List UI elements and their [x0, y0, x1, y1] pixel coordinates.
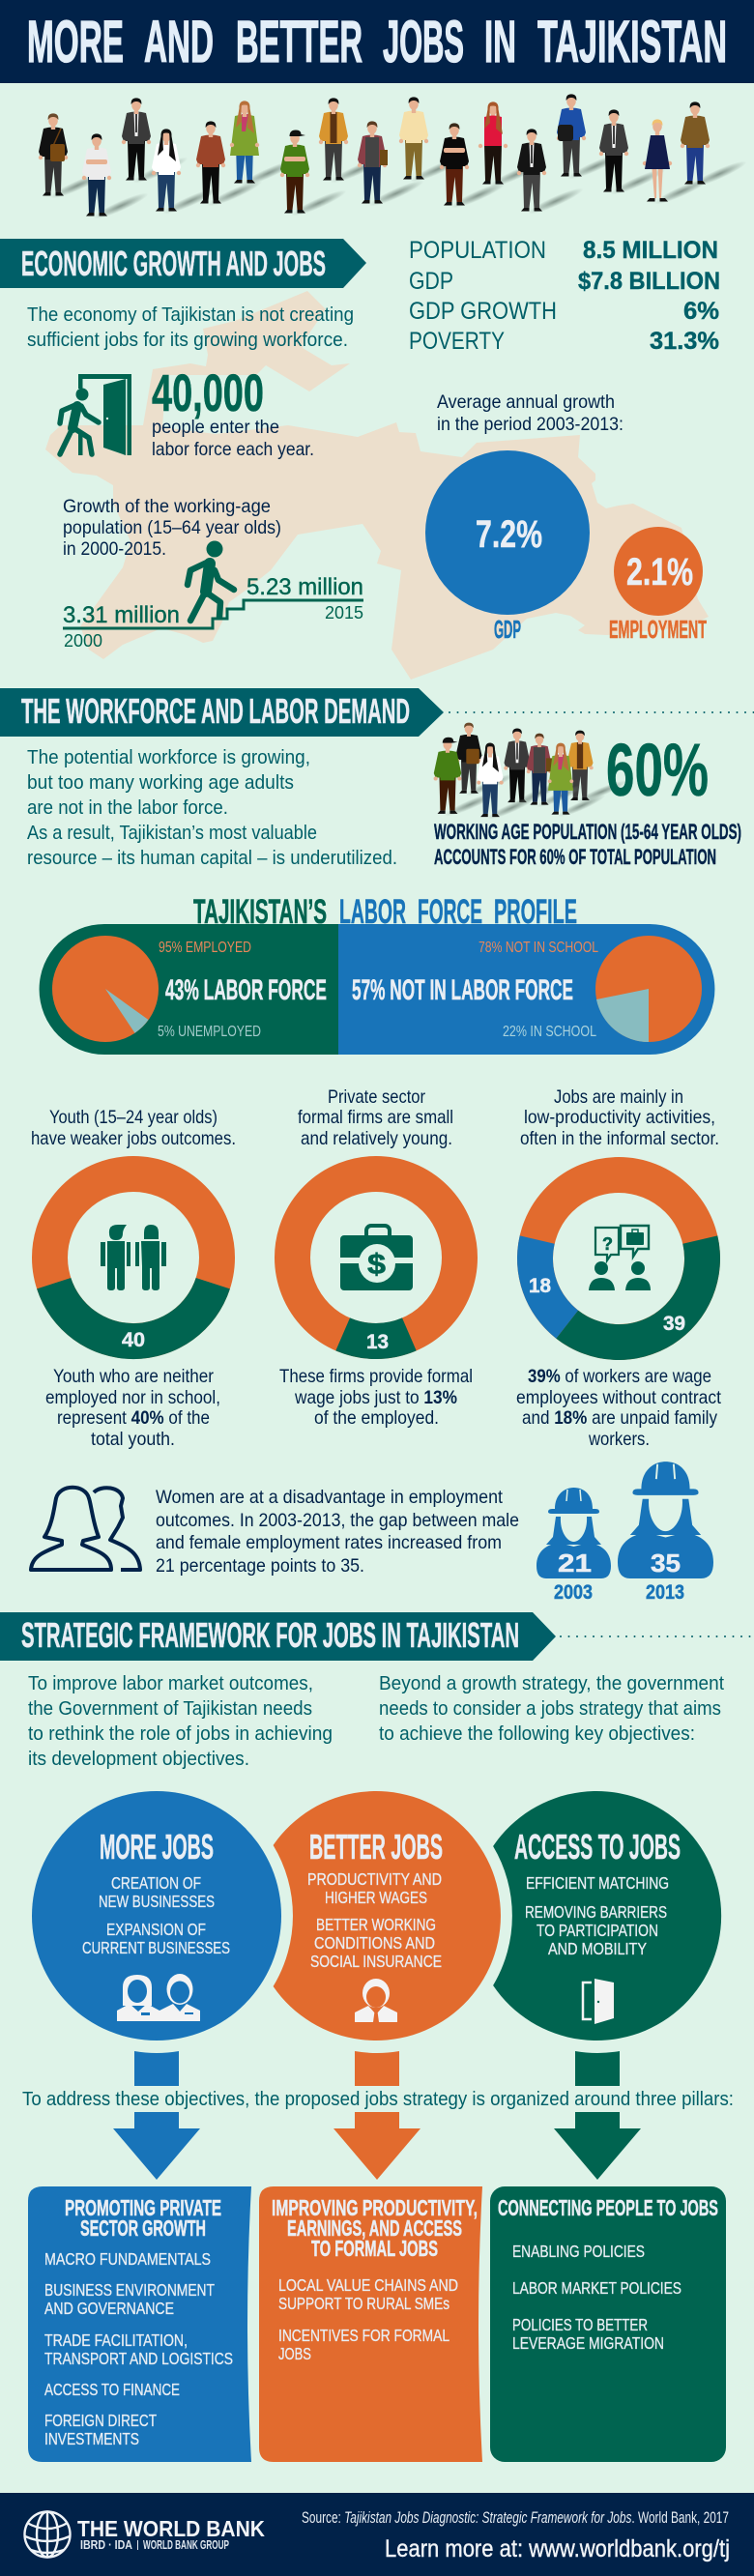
- World Bank wordmark: WORLD BANK GROUP: [143, 2538, 229, 2552]
- bubble: GDP growth: GDP: [494, 615, 521, 644]
- working-age growth caption: in 2000-2015.: [63, 539, 166, 560]
- icon: person entering door: [60, 374, 131, 455]
- bubble: GDP growth: [425, 450, 590, 644]
- objective circle: more jobs: CURRENT BUSINESSES: [82, 1938, 230, 1957]
- framework text right: needs to consider a jobs strategy that aims: [379, 1697, 721, 1720]
- icon: helmeted woman 2003: [536, 1488, 611, 1604]
- title banner: JOBS: [383, 9, 464, 74]
- stat: 40,000 people: [152, 364, 314, 460]
- objective circle: more jobs: NEW BUSINESSES: [99, 1892, 215, 1911]
- heading: labor force profile: [193, 893, 577, 931]
- panel: promoting private sector growth: ACCESS TO FINANCE: [44, 2380, 180, 2399]
- framework text left: to rethink the role of jobs in achieving: [28, 1722, 333, 1745]
- objective circle: better jobs: CONDITIONS AND: [314, 1933, 435, 1953]
- title banner: MORE: [27, 9, 124, 74]
- icon: man and woman outline: [31, 1488, 140, 1570]
- panel: labor force: [40, 924, 338, 1055]
- key statistics table: 8.5 MILLION: [583, 237, 718, 264]
- bubble: employment growth: [609, 527, 707, 644]
- heading: labor force profile: LABOR: [339, 893, 406, 931]
- key statistics table: 6%: [683, 298, 719, 325]
- panel: low-productivity donut: employees without contract: [516, 1387, 722, 1408]
- framework text right: Beyond a growth strategy, the government: [379, 1672, 724, 1694]
- panel: not in labor force: [338, 924, 714, 1055]
- panel: promoting private sector growth: AND GOVERNANCE: [44, 2299, 174, 2318]
- objective circle: access to jobs: TO PARTICIPATION: [536, 1921, 658, 1940]
- objective circle: better jobs: [274, 1791, 501, 2041]
- key statistics table: [409, 237, 720, 355]
- panel: low-productivity donut: workers.: [588, 1429, 650, 1450]
- bubble: employment growth: 2.1%: [626, 551, 693, 593]
- objective circle: more jobs: EXPANSION OF: [106, 1920, 206, 1939]
- stairs chart: working-age population 2000 to 2015: 2000: [64, 631, 102, 651]
- arrow stem: more jobs: [134, 2051, 179, 2086]
- stat: 40,000 people: labor force each year.: [152, 439, 314, 460]
- row of people illustration: [39, 94, 748, 222]
- panel: youth donut: total youth.: [91, 1429, 175, 1450]
- average growth caption: [437, 392, 624, 435]
- stat: 40,000 people: people enter the: [152, 417, 279, 438]
- panel: private firms donut: [279, 1086, 473, 1429]
- icon: two staff busts: [117, 1974, 200, 2021]
- framework text right: to achieve the following key objectives:: [379, 1722, 695, 1745]
- section heading: workforce and labor demand: THE WORKFORCE AND LABOR DEMAND: [21, 691, 410, 731]
- icon: helmeted woman 2013: 35: [651, 1548, 681, 1577]
- framework text right: [379, 1672, 724, 1745]
- icon: helmeted woman 2003: 2003: [554, 1581, 593, 1604]
- stat: 60 percent: [434, 729, 741, 869]
- key statistics table: POVERTY: [409, 328, 505, 355]
- panel: private firms donut: 13: [366, 1331, 389, 1353]
- intro text: The economy of Tajikistan is not creating: [27, 304, 354, 326]
- map of Tajikistan: [45, 291, 709, 680]
- panel: labor force: 95% EMPLOYED: [159, 940, 251, 956]
- objective circle: better jobs: SOCIAL INSURANCE: [310, 1952, 442, 1971]
- panel: promoting private sector growth: MACRO FUNDAMENTALS: [44, 2249, 211, 2269]
- panel: promoting private sector growth: [28, 2186, 251, 2462]
- objective circle: better jobs: BETTER WORKING: [316, 1915, 436, 1934]
- objective circle: access to jobs: AND MOBILITY: [548, 1939, 647, 1958]
- framework text left: the Government of Tajikistan needs: [28, 1697, 312, 1720]
- stairs chart: working-age population 2000 to 2015: [63, 541, 363, 651]
- workforce text: but too many working age adults: [27, 771, 294, 794]
- panel: youth donut: [31, 1107, 236, 1450]
- section heading: economic growth and jobs: ECONOMIC GROWTH AND JOBS: [21, 244, 326, 283]
- objective circle: more jobs: MORE JOBS: [100, 1827, 214, 1867]
- objective circle: access to jobs: EFFICIENT MATCHING: [526, 1873, 669, 1893]
- stairs chart: working-age population 2000 to 2015: 5.23 million: [246, 574, 363, 600]
- women employment text: [156, 1487, 519, 1577]
- panel: not in labor force: 78% NOT IN SCHOOL: [478, 940, 598, 956]
- panel: labor force: 5% UNEMPLOYED: [158, 1024, 261, 1040]
- panel: not in labor force: 57% NOT IN LABOR FORCE: [352, 974, 573, 1006]
- women employment text: 21 percentage points to 35.: [156, 1555, 364, 1577]
- icon: helmeted woman 2013: 2013: [646, 1581, 684, 1604]
- heading: labor force profile: PROFILE: [494, 893, 577, 931]
- panel: improving productivity: INCENTIVES FOR FORMAL: [278, 2326, 450, 2345]
- panel: connecting people to jobs: POLICIES TO BETTER: [512, 2315, 648, 2334]
- panel: youth donut: represent 40% of the: [57, 1407, 210, 1429]
- panel: low-productivity donut: often in the informal sector.: [520, 1128, 719, 1149]
- panel: promoting private sector growth: TRADE FACILITATION,: [44, 2330, 188, 2350]
- panel: private firms donut: formal firms are small: [298, 1107, 453, 1128]
- icon: helmeted woman 2013: [618, 1462, 713, 1604]
- framework text left: [28, 1672, 333, 1770]
- intro text: [27, 304, 354, 351]
- women employment text: Women are at a disadvantage in employment: [156, 1487, 504, 1508]
- working-age growth caption: population (15–64 year olds): [63, 518, 281, 538]
- panel: private firms donut: Private sector: [328, 1086, 425, 1108]
- workforce text: resource – its human capital – is underutilized.: [27, 847, 397, 869]
- panel: connecting people to jobs: LABOR MARKET POLICIES: [512, 2278, 682, 2298]
- icon: open door: [583, 1979, 614, 2024]
- panel: youth donut: Youth (15–24 year olds): [49, 1107, 218, 1128]
- icon: manager bust: [355, 1979, 397, 2022]
- World Bank wordmark: THE WORLD BANK: [77, 2516, 265, 2541]
- panel: improving productivity: IMPROVING PRODUCTIVITY,: [272, 2195, 478, 2220]
- workforce text: As a result, Tajikistan’s most valuable: [27, 822, 317, 844]
- objective circle: better jobs: BETTER JOBS: [309, 1827, 443, 1867]
- working-age growth caption: [63, 497, 281, 560]
- panel: low-productivity donut: [516, 1086, 722, 1450]
- title banner: IN: [484, 9, 516, 74]
- panel: promoting private sector growth: BUSINESS ENVIRONMENT: [44, 2280, 215, 2300]
- arrow: green: [554, 2112, 641, 2180]
- panel: private firms donut: and relatively young.: [301, 1128, 452, 1149]
- panel: promoting private sector growth: PROMOTING PRIVATE: [65, 2195, 221, 2220]
- section heading: economic growth and jobs: [0, 239, 366, 288]
- objective circle: access to jobs: [493, 1791, 721, 2041]
- key statistics table: GDP: [409, 268, 453, 295]
- panel: improving productivity: JOBS: [278, 2344, 311, 2363]
- title banner: BETTER: [236, 9, 362, 74]
- World Bank wordmark: IBRD · IDA: [80, 2538, 132, 2552]
- women employment text: outcomes. In 2003-2013, the gap between male: [156, 1510, 519, 1531]
- icon: World Bank globe logo: [25, 2511, 70, 2558]
- panel: improving productivity: EARNINGS, AND ACCESS: [287, 2215, 462, 2241]
- panel: low-productivity donut: 39% of workers are wage: [528, 1366, 711, 1387]
- panel: low-productivity donut: 18: [529, 1275, 551, 1297]
- panel: youth donut: 40: [122, 1329, 145, 1351]
- objective circle: more jobs: [32, 1791, 281, 2041]
- arrow: blue: [113, 2112, 200, 2180]
- framework text left: its development objectives.: [28, 1748, 249, 1770]
- panel: improving productivity: [259, 2186, 482, 2462]
- panel: low-productivity donut: 39: [663, 1313, 685, 1335]
- women employment text: and female employment rates increased from: [156, 1532, 502, 1553]
- arrow stem: access to jobs: [575, 2051, 620, 2086]
- bubble: GDP growth: 7.2%: [476, 513, 542, 556]
- panel: improving productivity: SUPPORT TO RURAL SMEs: [278, 2294, 450, 2313]
- panel: labor force: 43% LABOR FORCE: [165, 974, 327, 1006]
- objective circle: access to jobs: REMOVING BARRIERS: [525, 1902, 667, 1922]
- key statistics table: POPULATION: [409, 237, 546, 264]
- panel: connecting people to jobs: [490, 2186, 726, 2462]
- panel: promoting private sector growth: SECTOR GROWTH: [80, 2215, 206, 2241]
- panel: low-productivity donut: low-productivity activities,: [524, 1107, 715, 1128]
- objective circle: better jobs: HIGHER WAGES: [325, 1888, 427, 1907]
- panel: low-productivity donut: ?: [602, 1234, 613, 1254]
- icon: helmeted woman 2003: 21: [558, 1548, 592, 1577]
- stairs chart: working-age population 2000 to 2015: 3.31 million: [63, 602, 180, 628]
- working-age growth caption: Growth of the working-age: [63, 497, 271, 517]
- arrow: orange: [334, 2112, 420, 2180]
- World Bank wordmark: [77, 2516, 265, 2552]
- panel: promoting private sector growth: INVESTMENTS: [44, 2429, 139, 2448]
- panel: private firms donut: wage jobs just to 13%: [294, 1387, 457, 1408]
- objective circle: better jobs: PRODUCTIVITY AND: [307, 1869, 442, 1889]
- group of people illustration: [434, 723, 628, 823]
- stat: 60 percent: 60%: [606, 729, 709, 812]
- panel: youth donut: Youth who are neither: [53, 1366, 214, 1387]
- heading: labor force profile: FORCE: [418, 893, 482, 931]
- panel: not in labor force: 22% IN SCHOOL: [503, 1024, 596, 1040]
- intro text: sufficient jobs for its growing workforce.: [27, 329, 348, 351]
- workforce text: The potential workforce is growing,: [27, 746, 310, 768]
- panel: private firms donut: of the employed.: [314, 1407, 439, 1429]
- panel: connecting people to jobs: LEVERAGE MIGRATION: [512, 2333, 664, 2353]
- panel: low-productivity donut: Jobs are mainly in: [554, 1086, 683, 1108]
- framework text left: To improve labor market outcomes,: [28, 1672, 313, 1694]
- key statistics table: GDP GROWTH: [409, 298, 557, 325]
- panel: private firms donut: These firms provide formal: [279, 1366, 473, 1387]
- arrow stem: better jobs: [355, 2051, 399, 2086]
- key statistics table: $7.8 BILLION: [578, 268, 720, 295]
- heading: labor force profile: TAJIKISTAN’S: [193, 893, 327, 931]
- title banner: [0, 0, 754, 83]
- panel: improving productivity: TO FORMAL JOBS: [311, 2236, 438, 2261]
- workforce text: are not in the labor force.: [27, 796, 228, 819]
- stat: 40,000 people: 40,000: [152, 364, 264, 422]
- objective circle: more jobs: CREATION OF: [111, 1873, 201, 1893]
- title banner: AND: [144, 9, 214, 74]
- average growth caption: in the period 2003-2013:: [437, 415, 624, 435]
- footer band: [0, 2493, 754, 2576]
- panel: improving productivity: LOCAL VALUE CHAINS AND: [278, 2275, 458, 2295]
- panel: promoting private sector growth: FOREIGN DIRECT: [44, 2411, 157, 2430]
- key statistics table: 31.3%: [650, 328, 719, 355]
- stairs chart: working-age population 2000 to 2015: 2015: [325, 603, 363, 622]
- panel: private firms donut: $: [367, 1249, 386, 1281]
- panel: low-productivity donut: and 18% are unpaid family: [522, 1407, 717, 1429]
- workforce text: [27, 746, 397, 869]
- panel: connecting people to jobs: ENABLING POLICIES: [512, 2242, 645, 2261]
- panel: youth donut: have weaker jobs outcomes.: [31, 1128, 236, 1149]
- average growth caption: Average annual growth: [437, 392, 615, 413]
- panel: promoting private sector growth: TRANSPORT AND LOGISTICS: [44, 2349, 233, 2368]
- panel: youth donut: employed nor in school,: [45, 1387, 220, 1408]
